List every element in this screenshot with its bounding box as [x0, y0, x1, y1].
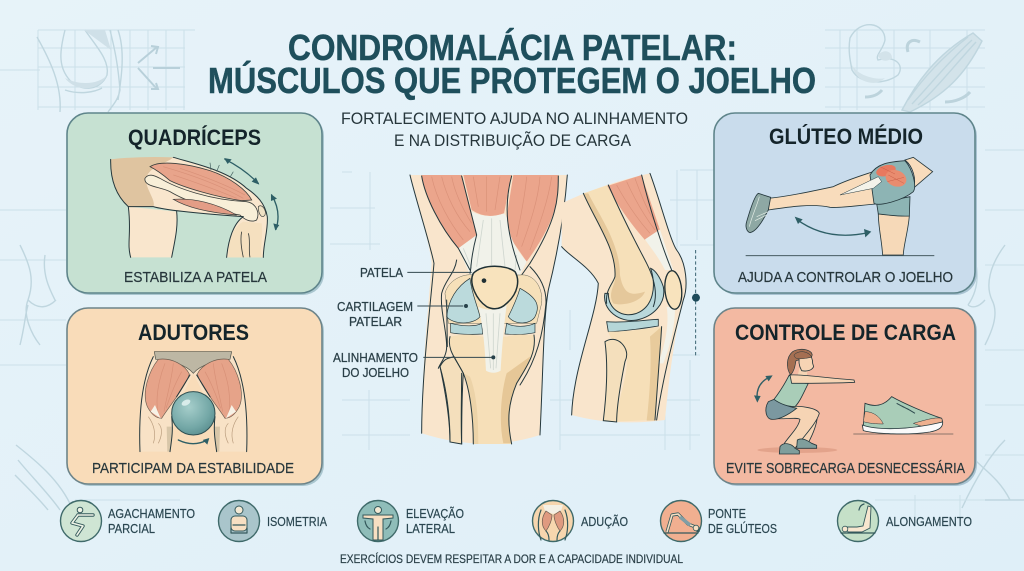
label: alinhamento do joelho: ALINHAMENTO — [333, 351, 418, 365]
label: cartilagem patelar: CARTILAGEM — [337, 300, 413, 314]
label: cartilagem patelar: PATELAR — [349, 315, 402, 329]
subtitle — [341, 109, 688, 150]
label: adução: ADUÇÃO — [581, 515, 628, 529]
label: patela: PATELA — [360, 266, 404, 280]
exercise: agachamento parcial — [60, 500, 195, 542]
label: elevação lateral: LATERAL — [406, 522, 455, 536]
caption: quadríceps: ESTABILIZA A PATELA — [124, 269, 267, 286]
exercise: isometria — [218, 500, 328, 542]
label: cartilagem patelar — [337, 300, 413, 329]
heading: controle de carga: CONTROLE DE CARGA — [735, 320, 956, 345]
label: elevação lateral: ELEVAÇÃO — [406, 507, 464, 521]
title: CONDROMALÁCIA PATELAR: — [288, 27, 737, 68]
illustration: sneaker — [853, 397, 953, 434]
label: alongamento: ALONGAMENTO — [886, 515, 972, 529]
illustration: leg abduction — [746, 157, 934, 256]
panel: quadríceps — [67, 113, 324, 295]
label: agachamento parcial: PARCIAL — [108, 522, 155, 536]
caption: adutores: PARTICIPAM DA ESTABILIDADE — [92, 460, 294, 477]
footer note: EXERCÍCIOS DEVEM RESPEITAR A DOR E A CAPACIDADE INDIVIDUAL — [340, 553, 684, 566]
label: alinhamento do joelho: DO JOELHO — [342, 366, 409, 380]
panel: glúteo médio — [714, 113, 977, 295]
heading: adutores: ADUTORES — [138, 320, 249, 345]
label: agachamento parcial — [108, 507, 195, 536]
exercise: adução — [532, 500, 628, 542]
heading: glúteo médio: GLÚTEO MÉDIO — [769, 124, 923, 149]
label: elevação lateral — [406, 507, 464, 536]
knee anatomy: front view — [407, 175, 567, 444]
label: alinhamento do joelho — [333, 351, 418, 380]
caption: glúteo médio: AJUDA A CONTROLAR O JOELHO — [738, 269, 953, 286]
illustration: bent knee with quadriceps — [111, 157, 279, 257]
exercise: ponte de glúteos — [660, 500, 777, 542]
panel: controle de carga — [714, 308, 977, 486]
label: isometria: ISOMETRIA — [267, 515, 328, 529]
caption: controle de carga: EVITE SOBRECARGA DESNECESSÁRIA — [726, 460, 965, 477]
illustration: adductor muscles and ball — [140, 352, 247, 452]
label: agachamento parcial: AGACHAMENTO — [108, 507, 195, 521]
panel: adutores — [67, 308, 324, 486]
label: ponte de glúteos: DE GLÚTEOS — [708, 521, 777, 536]
heading: quadríceps: QUADRÍCEPS — [128, 125, 261, 150]
exercise: elevação lateral — [358, 500, 464, 542]
exercise: alongamento — [838, 500, 972, 542]
title: MÚSCULOS QUE PROTEGEM O JOELHO — [208, 59, 816, 101]
illustration: woman squatting — [754, 349, 855, 454]
label: ponte de glúteos: PONTE — [708, 507, 746, 521]
title — [208, 27, 816, 101]
subtitle: FORTALECIMENTO AJUDA NO ALINHAMENTO — [341, 109, 688, 128]
knee anatomy: side view — [562, 173, 700, 422]
label: ponte de glúteos — [708, 507, 777, 536]
subtitle: E NA DISTRIBUIÇÃO DE CARGA — [394, 131, 632, 150]
